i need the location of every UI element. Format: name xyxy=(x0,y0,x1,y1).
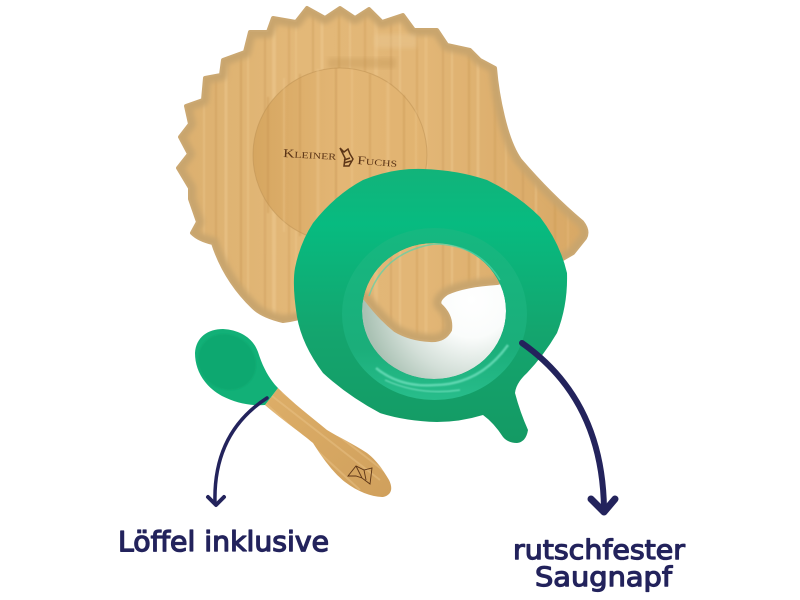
photo: spoon xyxy=(187,323,391,497)
engraved logo: Kleiner Fuchs: FUCHS xyxy=(357,153,398,170)
label: spoon included: Löffel inklusive xyxy=(118,525,329,558)
label: non-slip suction cup xyxy=(513,535,686,593)
inner ring xyxy=(342,228,527,400)
spoon handle xyxy=(265,388,391,497)
label: non-slip suction cup: rutschfester xyxy=(513,535,686,566)
engraved patch near top edge xyxy=(375,34,417,48)
photo: green suction ring xyxy=(294,169,567,443)
plate rim shading xyxy=(178,8,586,340)
arrow: ring to label xyxy=(522,343,615,512)
photo: hedgehog bamboo plate xyxy=(178,0,586,350)
dark band above centre circle xyxy=(328,58,396,68)
spoon bowl xyxy=(195,329,278,405)
plate centre circle xyxy=(253,68,427,242)
spoon fox engraving xyxy=(348,466,372,484)
infographic canvas xyxy=(120,6,686,592)
ring highlight xyxy=(376,345,508,385)
engraved logo: Kleiner Fuchs: KLEINER xyxy=(283,146,337,163)
label: non-slip suction cup: Saugnapf xyxy=(535,562,674,593)
engraved logo: Kleiner Fuchs xyxy=(283,146,398,170)
bamboo grain xyxy=(204,18,568,332)
arrow: spoon to label xyxy=(208,398,267,505)
photo: hole backdrop under suction ring xyxy=(360,242,508,380)
